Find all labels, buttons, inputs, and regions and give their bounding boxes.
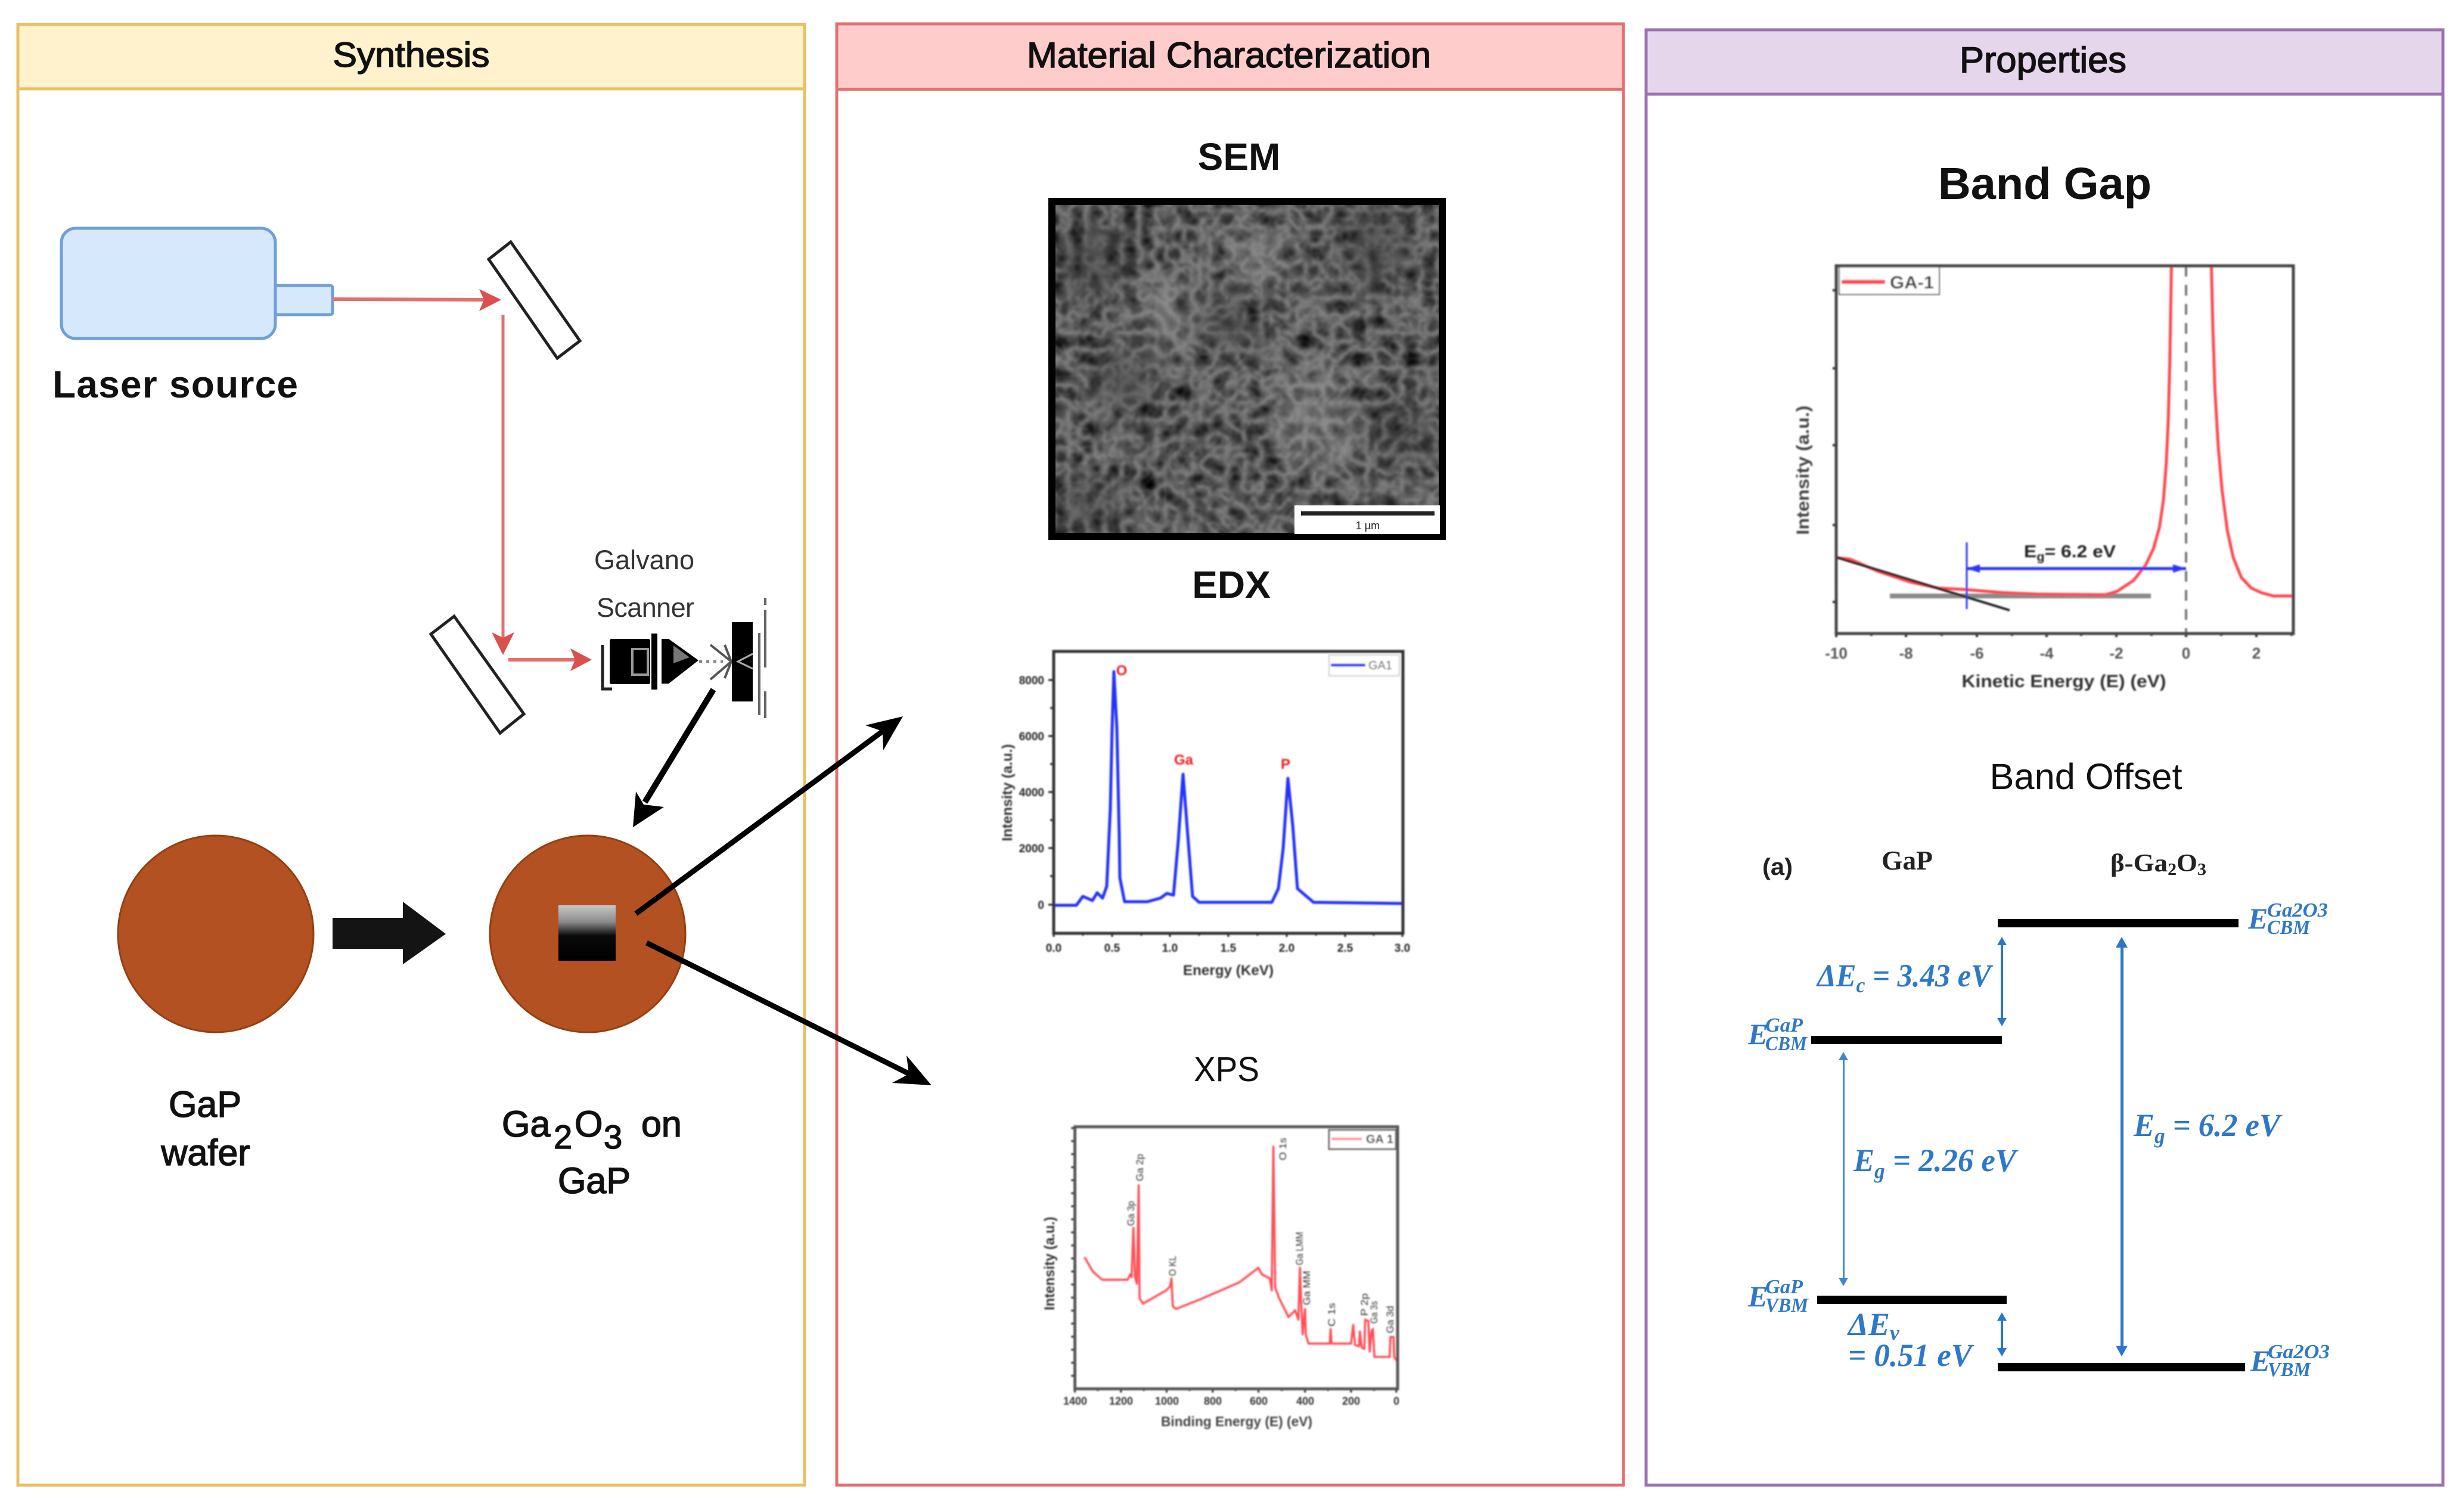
- EDX peak labels: P: [1281, 756, 1290, 772]
- band gap x tick labels: [1825, 644, 2261, 662]
- beta Ga2O3 column label: O: [2177, 850, 2197, 877]
- valence offset value: [1847, 1306, 1974, 1373]
- XPS x tick labels: 200: [1342, 1395, 1360, 1407]
- label: Ga2O3 valence band maximum: VBM: [2268, 1359, 2312, 1381]
- band gap legend: [1839, 267, 1939, 294]
- EDX y tick labels: 6000: [1019, 731, 1044, 743]
- band gap y axis title: Intensity (a.u.): [1793, 405, 1813, 535]
- Ga2O3 on GaP label: on: [641, 1104, 682, 1144]
- characterization heading: Material Characterization: [1027, 35, 1431, 75]
- Ga2O3 on GaP label: 2: [554, 1118, 572, 1156]
- conduction offset value: = 3.43 eV: [1865, 958, 1994, 993]
- XPS legend: [1329, 1130, 1396, 1149]
- label: Ga2O3 valence band maximum: E: [2250, 1344, 2270, 1377]
- XPS legend: GA 1: [1366, 1133, 1393, 1146]
- valence offset value: v: [1890, 1321, 1900, 1345]
- arrow: scanner to wafer: [633, 690, 713, 827]
- arrow: wafer to SEM and EDX: [636, 716, 903, 914]
- band gap value label: = 6.2 eV: [2045, 542, 2116, 561]
- synthesis header bar: [18, 24, 805, 89]
- scale bar: 1 µm: [1356, 520, 1380, 532]
- band gap x tick labels: 0: [2182, 644, 2190, 662]
- baseline fit: [1890, 594, 2151, 598]
- chart: EDX spectrum: [999, 651, 1410, 979]
- EDX peak labels: O: [1116, 663, 1127, 679]
- energy level bars: [1811, 919, 2245, 1371]
- valence offset value: = 0.51 eV: [1848, 1337, 1974, 1373]
- band gap heading: Band Gap: [1938, 159, 2151, 209]
- Ga2O3 on GaP label: GaP: [558, 1160, 631, 1201]
- GaP wafer label: [160, 1084, 250, 1173]
- label: Ga2O3 conduction band minimum: CBM: [2267, 917, 2311, 939]
- XPS peak labels: Ga 3p: [1125, 1201, 1137, 1226]
- XPS x tick labels: 400: [1296, 1395, 1314, 1407]
- EDX y tick labels: 8000: [1019, 675, 1044, 687]
- EDX x tick labels: 1.0: [1162, 942, 1178, 955]
- label: Ga2O3 valence band maximum: [2250, 1341, 2330, 1381]
- band gap x tick labels: -2: [2109, 644, 2123, 662]
- zero reference line: [2185, 266, 2187, 634]
- panel: properties: [1646, 30, 2443, 1485]
- synthesis heading: Synthesis: [333, 36, 490, 74]
- galvano scanner label: Scanner: [597, 592, 694, 623]
- XPS x tick labels: 1200: [1109, 1395, 1133, 1407]
- GaP band gap value: = 2.26 eV: [1885, 1142, 2019, 1178]
- XPS peak labels: Ga LMM: [1294, 1232, 1305, 1265]
- panel: material characterization: [837, 24, 1623, 1485]
- XPS peak labels: Ga 3d: [1384, 1306, 1396, 1333]
- scale bar: [1294, 505, 1440, 534]
- Ga2O3 band gap value: = 6.2 eV: [2165, 1107, 2283, 1143]
- Ga2O3 on GaP label: [502, 1104, 682, 1201]
- label: GaP conduction band minimum: [1747, 1014, 1808, 1055]
- arrow: mirror one to mirror two: [492, 315, 514, 655]
- GaP wafer label: wafer: [160, 1132, 250, 1173]
- XPS peak labels: O 1s: [1277, 1138, 1289, 1160]
- XPS x tick labels: 600: [1250, 1395, 1268, 1407]
- XPS peak labels: Ga MM: [1301, 1271, 1312, 1305]
- band gap x tick labels: -8: [1899, 644, 1913, 662]
- label: Ga2O3 conduction band minimum: Ga2O3: [2267, 899, 2328, 921]
- conduction offset value: ΔE: [1817, 958, 1859, 993]
- SEM heading: SEM: [1198, 135, 1280, 178]
- XPS x tick labels: 800: [1204, 1395, 1222, 1407]
- EDX x tick labels: 0.5: [1104, 942, 1120, 955]
- arrow: mirror two to scanner: [508, 648, 592, 671]
- panel tag (a): (a): [1762, 854, 1793, 880]
- Ga2O3 on GaP label: Ga: [502, 1104, 550, 1144]
- galvano scanner label: Galvano: [594, 545, 694, 575]
- band gap legend: GA-1: [1890, 273, 1934, 293]
- valence offset value: ΔE: [1848, 1306, 1890, 1342]
- label: Ga2O3 valence band maximum: Ga2O3: [2268, 1341, 2330, 1363]
- band gap bracket arrow: [1967, 542, 2186, 609]
- XPS x tick labels: 1400: [1063, 1395, 1087, 1407]
- band gap x tick labels: -10: [1825, 644, 1848, 662]
- EDX y tick labels: [1019, 675, 1044, 912]
- arrow: Ga2O3 band gap: [2116, 937, 2128, 1356]
- label: GaP conduction band minimum: E: [1747, 1017, 1768, 1051]
- properties heading: Properties: [1960, 40, 2126, 80]
- icon: laser source: [61, 228, 333, 339]
- beta Ga2O3 column label: β-Ga: [2110, 850, 2164, 877]
- Ga2O3 band gap value: g: [2154, 1124, 2165, 1148]
- XPS peak labels: [1125, 1138, 1396, 1333]
- Ga2O3 on GaP label: O: [575, 1104, 603, 1144]
- beta Ga2O3 column label: 2: [2168, 861, 2177, 879]
- EDX x tick labels: 0.0: [1046, 942, 1061, 955]
- mirror one: [489, 242, 580, 358]
- EDX x tick labels: 2.0: [1279, 942, 1294, 955]
- label: Ga2O3 conduction band minimum: E: [2247, 902, 2268, 935]
- laser source label: Laser source: [52, 363, 298, 406]
- XPS peak labels: P 2p: [1359, 1293, 1370, 1316]
- EDX y tick labels: 0: [1038, 899, 1044, 912]
- band gap x axis title: Kinetic Energy (E) (eV): [1962, 672, 2166, 691]
- label: GaP valence band maximum: [1747, 1276, 1809, 1317]
- label: GaP conduction band minimum: GaP: [1765, 1014, 1803, 1036]
- XPS x tick labels: 1000: [1155, 1395, 1179, 1407]
- properties header bar: [1646, 30, 2443, 94]
- galvano scanner label: [594, 545, 694, 623]
- conduction offset value: c: [1856, 973, 1865, 997]
- wafer: Ga2O3 on GaP: [490, 836, 685, 1032]
- characterization header bar: [837, 24, 1623, 89]
- Ga2O3 on GaP label: 3: [604, 1118, 622, 1156]
- chart: XPS survey: [1042, 1127, 1399, 1429]
- GaP wafer label: GaP: [169, 1084, 241, 1125]
- band gap x tick labels: -6: [1970, 644, 1984, 662]
- label: GaP valence band maximum: VBM: [1765, 1294, 1809, 1317]
- arrow: laser to mirror one: [333, 289, 501, 311]
- XPS peak labels: Ga 2p: [1134, 1154, 1145, 1181]
- icon: galvano scanner: [603, 598, 765, 718]
- band gap value label: E: [2024, 542, 2035, 561]
- label: GaP conduction band minimum: CBM: [1765, 1033, 1808, 1055]
- XPS x axis title: Binding Energy (E) (eV): [1161, 1414, 1312, 1429]
- XPS peak labels: Ga 3s: [1368, 1301, 1380, 1324]
- band gap value label: g: [2036, 551, 2045, 564]
- EDX x tick labels: 2.5: [1337, 942, 1353, 955]
- XPS x tick labels: [1063, 1395, 1399, 1407]
- XPS peak labels: C 1s: [1326, 1303, 1337, 1327]
- EDX heading: EDX: [1192, 563, 1271, 606]
- EDX y axis title: Intensity (a.u.): [999, 744, 1016, 842]
- band gap x tick labels: -4: [2039, 644, 2054, 662]
- EDX x tick labels: 3.0: [1395, 942, 1410, 955]
- EDX x tick labels: 1.5: [1221, 942, 1237, 955]
- band offset heading: Band Offset: [1989, 756, 2182, 797]
- band gap x tick labels: 2: [2252, 644, 2261, 662]
- label: GaP valence band maximum: E: [1747, 1280, 1768, 1313]
- wafer: bare GaP: [118, 836, 313, 1032]
- XPS peak labels: O KL: [1167, 1256, 1178, 1276]
- EDX peak labels: [1116, 663, 1290, 772]
- block arrow: process step: [333, 902, 446, 964]
- arrow: conduction offset: [1997, 937, 2007, 1026]
- beta Ga2O3 column label: 3: [2197, 861, 2206, 879]
- EDX peak labels: Ga: [1174, 752, 1194, 768]
- panel: synthesis: [18, 24, 805, 1485]
- GaP band gap value: E: [1854, 1142, 1875, 1178]
- XPS y axis title: Intensity (a.u.): [1042, 1217, 1058, 1310]
- EDX y tick labels: 2000: [1019, 843, 1044, 855]
- EDX y tick labels: 4000: [1019, 787, 1044, 799]
- chart: band gap spectrum: [1793, 266, 2293, 691]
- EDX x axis title: Energy (KeV): [1183, 963, 1274, 979]
- oxide patch on wafer: [558, 905, 616, 961]
- GaP band gap value: g: [1874, 1159, 1885, 1183]
- XPS x tick labels: 0: [1393, 1395, 1399, 1407]
- Ga2O3 band gap value: E: [2134, 1107, 2155, 1143]
- diagram: band offset: [1747, 846, 2330, 1381]
- GaP column label: GaP: [1882, 846, 1933, 875]
- label: GaP valence band maximum: GaP: [1765, 1276, 1803, 1298]
- valence edge tangent: [1836, 557, 2010, 610]
- EDX legend: [1329, 655, 1399, 676]
- XPS heading: XPS: [1194, 1050, 1259, 1089]
- label: Ga2O3 conduction band minimum: [2247, 899, 2328, 939]
- arrow: GaP band gap: [1839, 1052, 1848, 1286]
- mirror two: [431, 616, 524, 733]
- arrow: wafer to XPS: [647, 943, 932, 1085]
- EDX x tick labels: [1046, 942, 1410, 955]
- SEM micrograph: [1052, 201, 1442, 536]
- arrow: valence offset: [1997, 1312, 2007, 1356]
- EDX legend: GA1: [1368, 659, 1392, 672]
